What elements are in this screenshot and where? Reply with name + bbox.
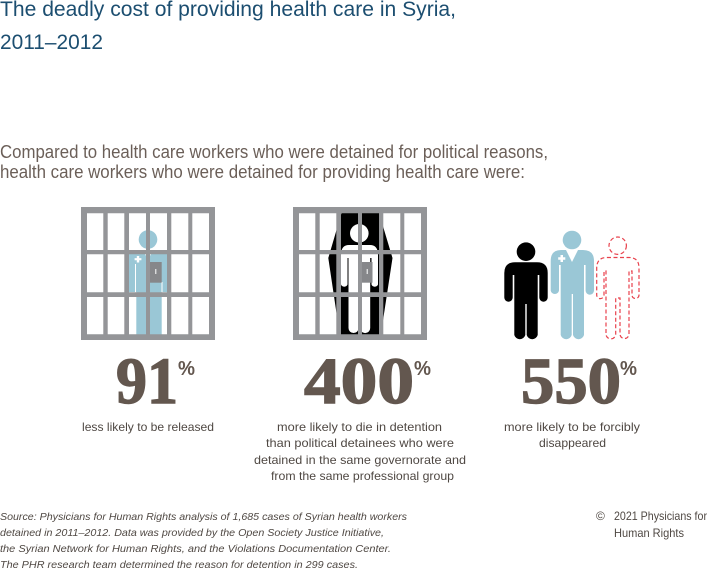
caption: disappeared: more likely to be forcibly	[504, 420, 640, 434]
stat: 91%: 91	[116, 345, 178, 418]
icon: person in coffin behind bars	[293, 207, 427, 340]
caption: disappeared	[504, 420, 640, 450]
icon: padlock	[362, 262, 372, 283]
source note: the Syrian Network for Human Rights, and the Violations Documentation Center.	[0, 543, 391, 555]
icon: three figures	[504, 231, 639, 339]
stat: 91%: %	[178, 358, 195, 380]
icon: black figure	[504, 242, 548, 339]
copyright	[596, 509, 707, 540]
source note	[0, 511, 408, 571]
copyright: Human Rights	[614, 526, 684, 540]
caption: die in detention: more likely to die in detention	[277, 420, 442, 434]
icon: padlock	[150, 262, 162, 283]
caption: released: less likely to be released	[82, 420, 214, 434]
caption: disappeared: disappeared	[539, 436, 606, 450]
caption: die in detention: from the same professional group	[271, 469, 454, 483]
title: 2011–2012	[0, 31, 103, 54]
intro text: health care workers who were detained for providing health care were:	[0, 162, 525, 182]
source note: detained in 2011–2012. Data was provided by the Open Society Justice Initiative,	[0, 527, 384, 539]
title	[0, 0, 456, 54]
stat: 400%: 400	[304, 345, 414, 418]
icon: medical figure	[551, 231, 594, 339]
intro text	[0, 142, 548, 182]
icon: medical cross	[135, 256, 141, 262]
icon: health worker behind bars	[81, 207, 215, 340]
stat: 400%: %	[414, 358, 431, 380]
source note: Source: Physicians for Human Rights analysis of 1,685 cases of Syrian health workers	[0, 511, 408, 523]
stat: 550%: %	[620, 358, 637, 380]
caption: die in detention	[254, 420, 466, 483]
intro text: Compared to health care workers who were detained for political reasons,	[0, 142, 548, 162]
icon: dashed red figure	[597, 237, 639, 339]
source note: The PHR research team determined the reason for detention in 299 cases.	[0, 559, 358, 571]
caption: die in detention: detained in the same governorate and	[254, 453, 466, 467]
copyright: ©	[596, 509, 605, 523]
caption: die in detention: than political detainees who were	[266, 436, 454, 450]
stat: 550%: 550	[521, 345, 621, 418]
